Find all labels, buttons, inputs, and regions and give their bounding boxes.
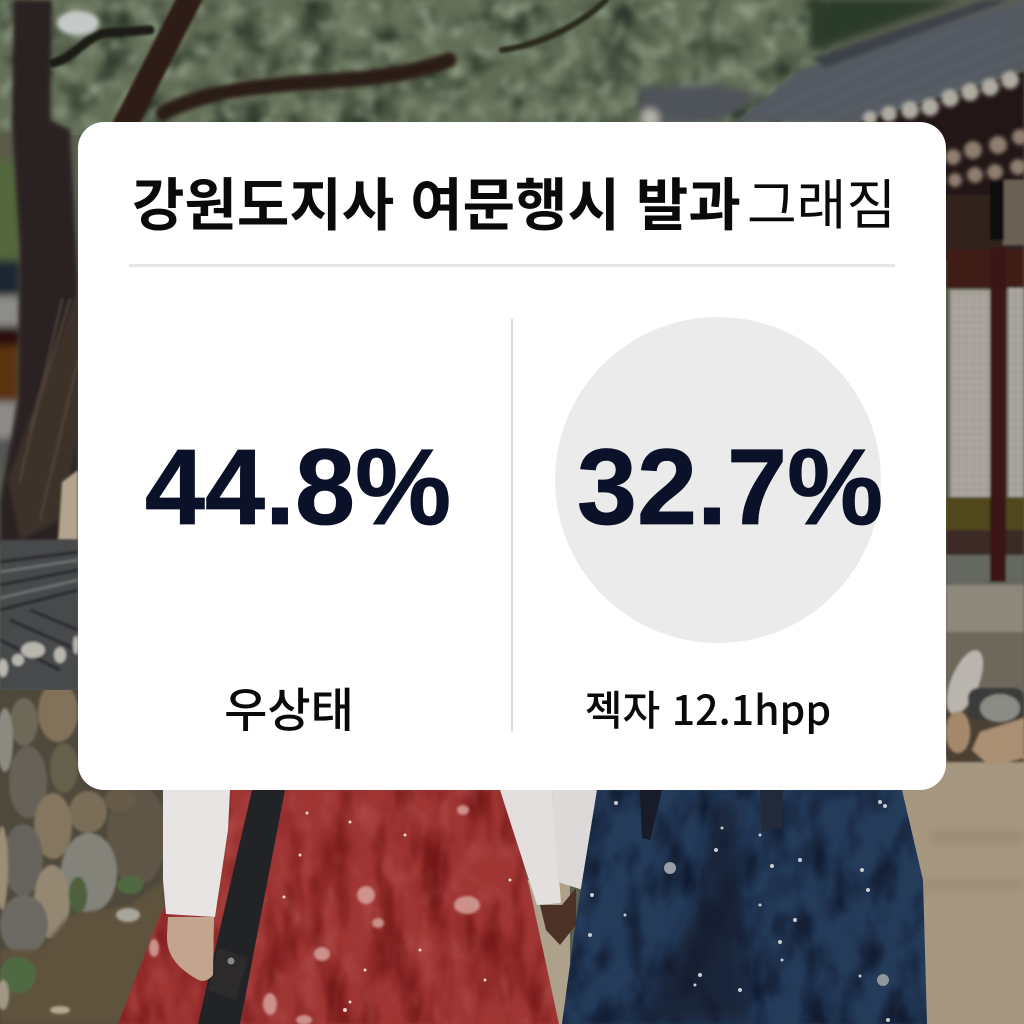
panel: white statistics card (78, 122, 946, 790)
title: 강원도지사 여문행시 발과 (132, 160, 741, 242)
left tiled wall top (0, 540, 79, 690)
left stat value: 44.8% (145, 426, 451, 547)
rafter ends (945, 129, 1024, 187)
roof (735, 0, 1024, 122)
pine trunk and branches (0, 0, 606, 545)
clasped hands (540, 888, 576, 945)
title: 그래짐 (747, 161, 896, 240)
left arm sleeve (163, 790, 230, 917)
house wall behind card (860, 72, 1024, 762)
right sleeve of left figure (500, 790, 561, 905)
left stat label: 우상태 (224, 672, 354, 741)
distant trees and small roof (640, 0, 960, 127)
stone wall (0, 682, 170, 1024)
right stat value: 32.7% (577, 426, 883, 547)
sleeve of right figure (552, 790, 597, 890)
left hand (167, 917, 214, 981)
courtyard ground (900, 755, 1024, 1024)
ground (0, 880, 165, 1024)
center vertical divider (511, 319, 513, 732)
navy skirt (555, 790, 935, 1024)
red skirt (110, 790, 570, 1024)
highlight circle behind right stat (555, 317, 881, 643)
roof tile ends (863, 71, 1019, 125)
left background strip (0, 130, 20, 468)
rocks lower right (939, 645, 1024, 766)
right stat label: 젝자 12.1hpp (585, 677, 831, 737)
pine foliage (0, 0, 830, 135)
title divider (129, 264, 895, 267)
